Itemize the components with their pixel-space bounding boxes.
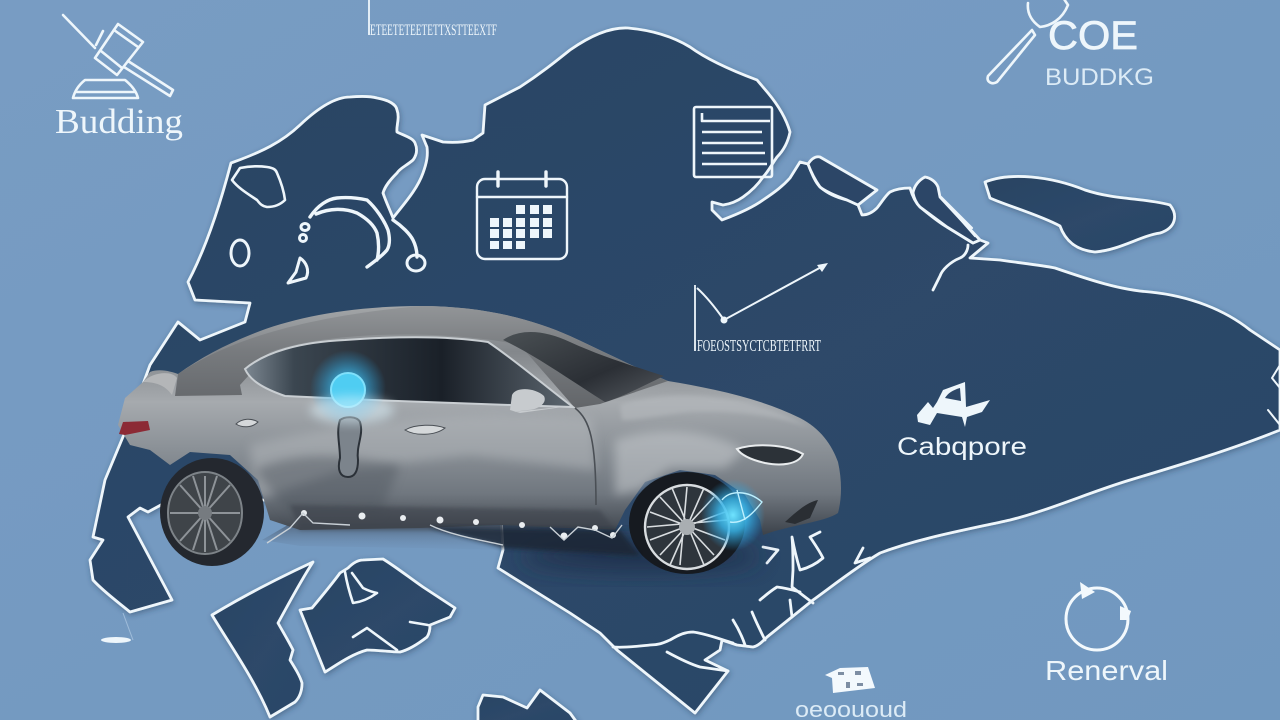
sill shade bbox=[290, 505, 615, 530]
calendar icon bbox=[477, 172, 567, 259]
window glow core bbox=[331, 373, 365, 407]
under-sill trim bbox=[267, 513, 622, 545]
elongated inlet island bbox=[913, 177, 980, 243]
north-east sliver island bbox=[808, 157, 877, 205]
renewal icon bbox=[1066, 582, 1131, 650]
south-east coast creeks bbox=[613, 532, 870, 671]
rear wheel bbox=[160, 458, 264, 566]
south island bbox=[300, 559, 455, 672]
inner inlet arcs bbox=[310, 198, 417, 267]
car bbox=[118, 306, 841, 574]
south island inner creek bbox=[345, 572, 428, 650]
label: renewal: Renerval bbox=[1045, 655, 1168, 686]
bottom cost icon bbox=[825, 667, 875, 693]
underside shadow on sea bbox=[262, 515, 503, 550]
spoiler bbox=[143, 373, 177, 395]
rear quarter shade bbox=[255, 456, 400, 515]
bottom island bbox=[478, 690, 578, 720]
cropped chart axis at top: ETEETETEETETTXSTTEEXTF bbox=[370, 22, 497, 39]
eastern river bbox=[933, 245, 968, 290]
front glow lines bbox=[722, 490, 762, 522]
heading: bidding label: Budding bbox=[55, 102, 183, 141]
east edge islet bbox=[1268, 365, 1280, 425]
cyan window glow halo bbox=[310, 350, 386, 426]
small islets bbox=[231, 224, 425, 283]
small white sea mark bbox=[101, 613, 133, 643]
mirror bbox=[510, 389, 570, 413]
door handle rear bbox=[236, 419, 258, 427]
windshield bbox=[503, 332, 664, 402]
cropped chart axis at top bbox=[369, 0, 497, 39]
south-west island bbox=[212, 562, 313, 717]
front shadow bbox=[520, 542, 760, 570]
heading: COE: COE bbox=[1048, 14, 1138, 58]
dark sill wedge bbox=[430, 527, 640, 556]
car body bbox=[118, 306, 841, 535]
glow flare on door bbox=[310, 396, 394, 424]
trend chart: FOEOSTSYCTCBTETFRRT bbox=[697, 336, 821, 355]
side window bbox=[245, 337, 573, 407]
left islet outline bbox=[232, 166, 285, 207]
door seam bbox=[575, 408, 596, 505]
magnifier icon bbox=[988, 0, 1068, 83]
tail light bbox=[119, 421, 150, 435]
headlight bbox=[737, 445, 803, 464]
door handle front bbox=[405, 425, 445, 434]
inner inlet line bbox=[941, 197, 975, 236]
document icon bbox=[694, 107, 772, 177]
front hood highlight bbox=[620, 395, 810, 428]
fender highlight bbox=[615, 431, 745, 495]
label: singapore: Cabqpore bbox=[897, 433, 1027, 461]
cyan front glow bbox=[701, 479, 765, 551]
front bumper grille bbox=[785, 500, 818, 524]
upper body shading bbox=[175, 306, 668, 408]
sill dots bbox=[301, 510, 616, 540]
door panel highlight bbox=[250, 415, 596, 500]
foot-shaped door emblem bbox=[338, 417, 361, 477]
front wheel bbox=[629, 472, 745, 574]
gavel icon bbox=[63, 15, 173, 98]
north-east island bbox=[985, 176, 1175, 252]
trend chart bbox=[695, 263, 828, 355]
singapore landmark icon bbox=[917, 382, 990, 427]
label: bidding: BUDDKG bbox=[1045, 64, 1154, 91]
